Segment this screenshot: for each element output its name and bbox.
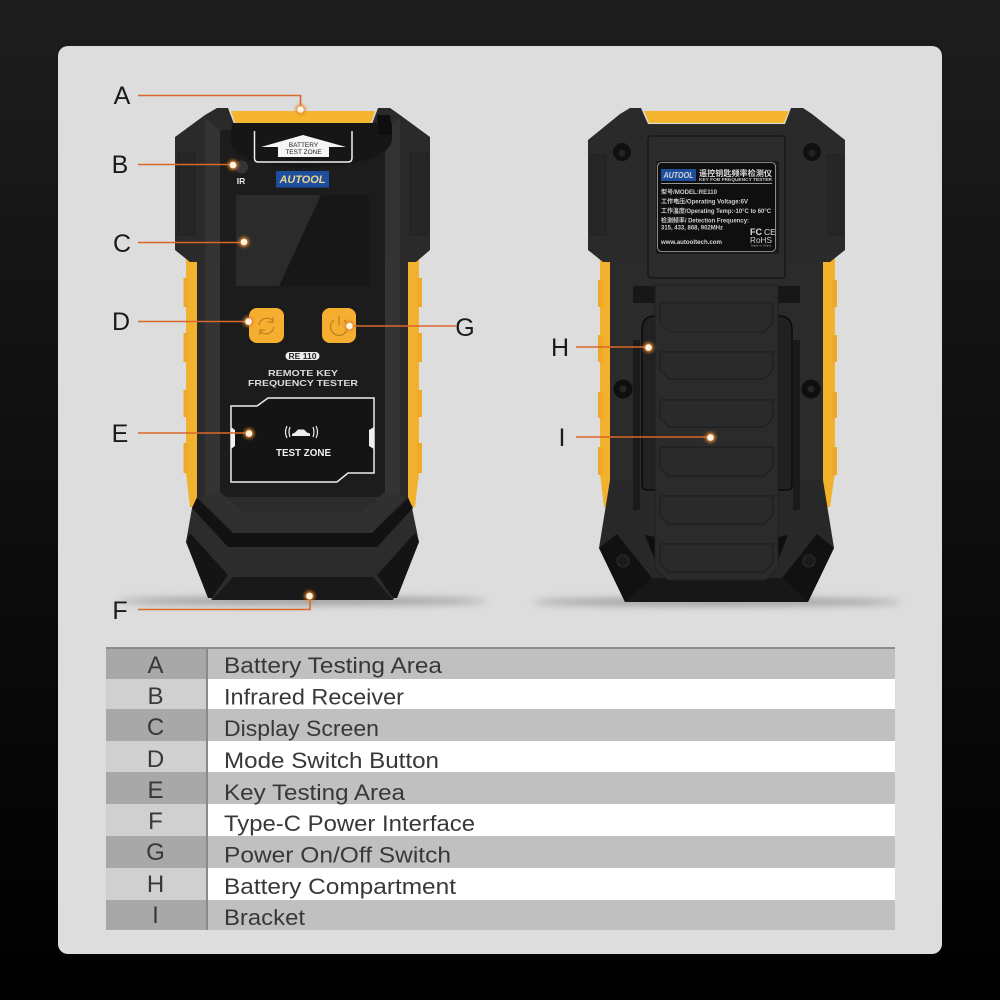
table row F: F — [148, 808, 163, 835]
callout G — [344, 314, 475, 342]
logo: AUTOOL: AUTOOL — [279, 174, 326, 186]
icon: screws — [613, 143, 821, 398]
table row C: Display Screen — [224, 716, 379, 741]
battery compartment — [642, 316, 792, 490]
bracket — [655, 285, 778, 580]
panel: specification label: 检测频率/ Detection Frequency: — [661, 216, 749, 224]
callout C: C — [113, 230, 131, 258]
panel: specification label: FC — [750, 227, 762, 237]
badge: RE 110: RE 110 — [288, 352, 317, 361]
product name: REMOTE KEY — [268, 368, 338, 378]
table row D: Mode Switch Button — [224, 748, 439, 773]
panel: key test zone: TEST ZONE — [276, 448, 331, 459]
table row C — [147, 714, 379, 741]
callout B — [112, 151, 238, 179]
callout H: H — [551, 334, 569, 362]
device: back view — [532, 108, 902, 606]
table row G — [146, 839, 451, 868]
panel: specification label: RoHS — [750, 235, 772, 245]
table row G: G — [146, 839, 165, 866]
panel: label recess — [648, 136, 785, 278]
callout F — [112, 591, 314, 625]
callout D: D — [112, 308, 130, 336]
callout I: I — [559, 424, 565, 452]
callout A: A — [114, 82, 131, 110]
logo: AUTOOL small: AUTOOL — [663, 171, 694, 180]
callout G: G — [455, 314, 475, 342]
panel: key test zone — [231, 398, 374, 482]
display screen — [236, 195, 369, 286]
hinge — [633, 286, 800, 303]
callout E — [112, 420, 254, 448]
table row A — [147, 652, 443, 679]
panel: specification label: 型号/MODEL:RE110 — [661, 188, 718, 196]
table row H: Battery Compartment — [224, 874, 457, 899]
product name: FREQUENCY TESTER — [248, 378, 358, 388]
heading: battery test zone marker: BATTERY — [289, 142, 319, 149]
icon: infrared sensor: IR — [237, 176, 245, 186]
panel: specification label: 工作电压/Operating Voltage:6V — [661, 198, 748, 206]
callout I — [559, 424, 716, 452]
table row D: D — [147, 746, 164, 773]
table row A: A — [147, 652, 164, 679]
device: front view — [118, 108, 488, 604]
panel: specification label: 315, 433, 868, 902MHz — [661, 226, 723, 232]
table row D — [147, 746, 439, 773]
table: parts legend — [106, 647, 895, 930]
table row A: Battery Testing Area — [224, 653, 443, 678]
table row B — [147, 683, 405, 710]
callout H — [551, 334, 654, 362]
table row F — [148, 808, 475, 836]
panel: specification label: Made in China — [751, 244, 772, 248]
button: power — [322, 308, 356, 343]
panel: specification label: 工作温度/Operating Temp:-10°C to 60°C — [661, 207, 772, 215]
callout A — [114, 82, 306, 114]
callout C — [113, 230, 249, 258]
table row B: Infrared Receiver — [224, 684, 405, 710]
callout E: E — [112, 420, 128, 448]
table row C: C — [147, 714, 164, 741]
logo: AUTOOL — [276, 171, 329, 188]
table row I — [152, 902, 306, 930]
panel: specification label — [656, 161, 779, 254]
table row F: Type-C Power Interface — [224, 811, 475, 836]
panel: specification label: www.autooltech.com — [660, 240, 722, 246]
panel: specification label: 遥控钥匙频率检测仪 — [699, 168, 772, 178]
table row I: Bracket — [224, 905, 306, 930]
icon: car signal — [286, 426, 318, 438]
table row E — [147, 777, 406, 805]
table row E: Key Testing Area — [224, 780, 406, 805]
table row H: H — [147, 871, 164, 898]
table row I: I — [152, 902, 159, 929]
callout F: F — [112, 597, 128, 625]
heading: battery test zone marker — [254, 131, 352, 162]
table row B: B — [147, 683, 164, 710]
button: mode switch — [249, 308, 284, 343]
panel: specification label: CE — [764, 227, 776, 237]
heading: battery test zone marker: TEST ZONE — [285, 149, 322, 156]
table row H — [147, 871, 457, 899]
callout B: B — [112, 151, 128, 179]
table row G: Power On/Off Switch — [224, 842, 451, 868]
table row E: E — [147, 777, 164, 804]
callout D — [112, 308, 254, 336]
panel: specification label: KEY FOB FREQUENCY TESTER — [699, 177, 773, 182]
product name — [248, 368, 358, 388]
icon: infrared sensor — [235, 160, 248, 186]
